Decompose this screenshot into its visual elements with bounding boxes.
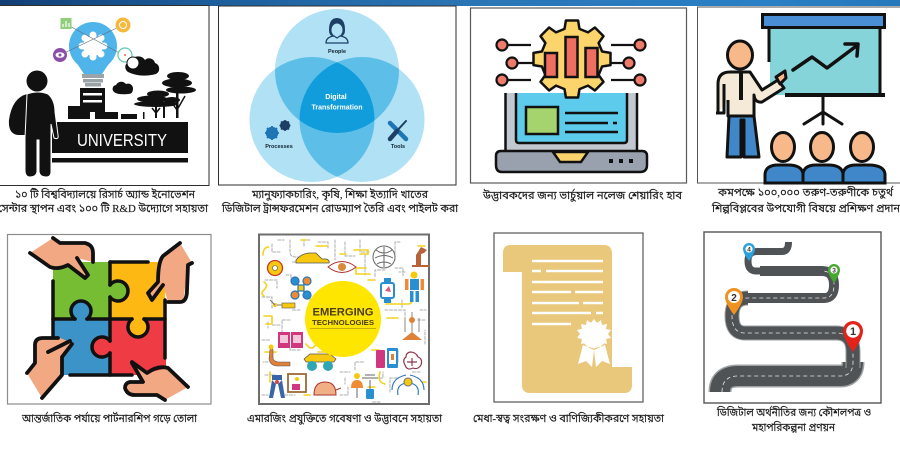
frame (218, 6, 456, 185)
icon: circuit nodes (496, 40, 646, 86)
caption: youth training: শিল্পবিপ্লবের উপযোগী বিষয়ে প্রশিক্ষণ প্রদান (711, 202, 900, 215)
cover title: EMERGING (312, 306, 374, 318)
icon: student silhouette (9, 70, 58, 177)
cover rule (310, 328, 376, 330)
label: processes: Processes (265, 144, 293, 150)
pin 3 (828, 264, 840, 283)
scroll text lines (532, 261, 603, 324)
caption: transformation roadmap: ম্যানুফ্যাকচারিং, কৃষি, শিক্ষা ইত্যাদি খাতের (251, 188, 428, 202)
icon: winding road (720, 242, 853, 392)
icon: university building: UNIVERSITY (77, 130, 167, 150)
panel: training presentation (698, 7, 900, 183)
pin 4 (743, 243, 755, 261)
frame (470, 8, 686, 183)
icon: tools (390, 121, 406, 139)
label: transformation: Transformation (312, 104, 362, 112)
pin 1 (843, 321, 863, 352)
icon: hand bottom left (27, 337, 72, 398)
icon: university building (52, 88, 188, 162)
caption: knowledge hub: উদ্ভাবকদের জন্য ভার্চুয়াল নলেজ শেয়ারিং হাব (482, 188, 682, 202)
caption: digital economy strategy: মহাপরিকল্পনা প্রণয়ন (751, 421, 835, 434)
panel: university research centres (0, 6, 209, 186)
pin 2: 2 (731, 293, 737, 304)
decorative doodles (262, 240, 427, 402)
caption: transformation roadmap: ডিজিটাল ট্রান্সফরমেশন রোডম্যাপ তৈরি এবং পাইলট করা (221, 202, 459, 215)
icon: puzzle pieces (53, 262, 166, 375)
icon: presentation board (762, 14, 885, 124)
pin 3: 3 (832, 268, 836, 274)
label: people: People (328, 49, 346, 55)
label: tools: Tools (391, 144, 405, 150)
icon: audience (765, 132, 885, 183)
caption: digital economy strategy: ডিজিটাল অর্থনীতির জন্য কৌশলপত্র ও (716, 405, 871, 419)
top banner strip (0, 0, 900, 6)
doodle icons (268, 246, 430, 399)
cover subtitle: TECHNOLOGIES (312, 318, 374, 327)
caption: transformation roadmap (221, 188, 459, 215)
icon: scroll document (503, 245, 632, 393)
icon: hand bottom right (125, 362, 188, 400)
icon: people (326, 18, 348, 43)
icon: gear with bar chart (534, 20, 610, 98)
caption: university centres (0, 187, 209, 215)
icon: gears (265, 120, 290, 140)
caption: youth training (711, 185, 900, 215)
panel: international partnership puzzle (8, 234, 211, 404)
frame (0, 6, 209, 186)
caption: university centres: সেন্টার স্থাপন এবং ১০০ টি R&D উদ্যোগে সহায়তা (0, 202, 209, 215)
frame (698, 7, 900, 183)
icon: laptop (496, 93, 647, 172)
frame (259, 234, 429, 404)
venn diagram circles (250, 9, 424, 182)
icon: hand top left (30, 238, 93, 278)
pin 2 (725, 288, 743, 315)
icon: presenter (716, 41, 786, 157)
frame (704, 232, 881, 403)
caption: partnership: আন্তর্জাতিক পর্যায়ে পার্টনারশিপ গড়ে তোলা (21, 411, 198, 425)
panel: intellectual property scroll (494, 233, 643, 402)
yellow circle (305, 281, 381, 357)
icon: clouds and trees (113, 56, 196, 119)
icon: light bulb with gear (53, 18, 132, 86)
label: digital transformation: Digital (325, 94, 347, 101)
icon: certificate seal (577, 319, 611, 367)
panel: emerging technologies cover (259, 234, 430, 404)
panel: digital economy roadmap (704, 232, 881, 403)
caption: youth training: কমপক্ষে ১০০,০০০ তরুণ-তরুণীকে চতুর্থ (717, 185, 894, 199)
caption: university centres: ১০ টি বিশ্ববিদ্যালয়ে রিসার্চ অ্যান্ড ইনোভেশন (15, 187, 195, 201)
caption: intellectual property: মেধা-স্বত্ব সংরক্ষণ ও বাণিজ্যিকীকরণে সহায়তা (473, 412, 665, 425)
pin 4: 4 (747, 246, 751, 254)
panel: knowledge sharing hub (470, 8, 686, 183)
icon: hand top right (148, 243, 192, 303)
caption: emerging technology: এমারজিং প্রযুক্তিতে গবেষণা ও উদ্ভাবনে সহায়তা (247, 412, 443, 425)
caption: digital economy strategy (716, 405, 871, 434)
panel: digital transformation venn (218, 6, 456, 185)
frame (8, 234, 211, 404)
frame (494, 233, 643, 402)
pin 1: 1 (850, 326, 856, 338)
